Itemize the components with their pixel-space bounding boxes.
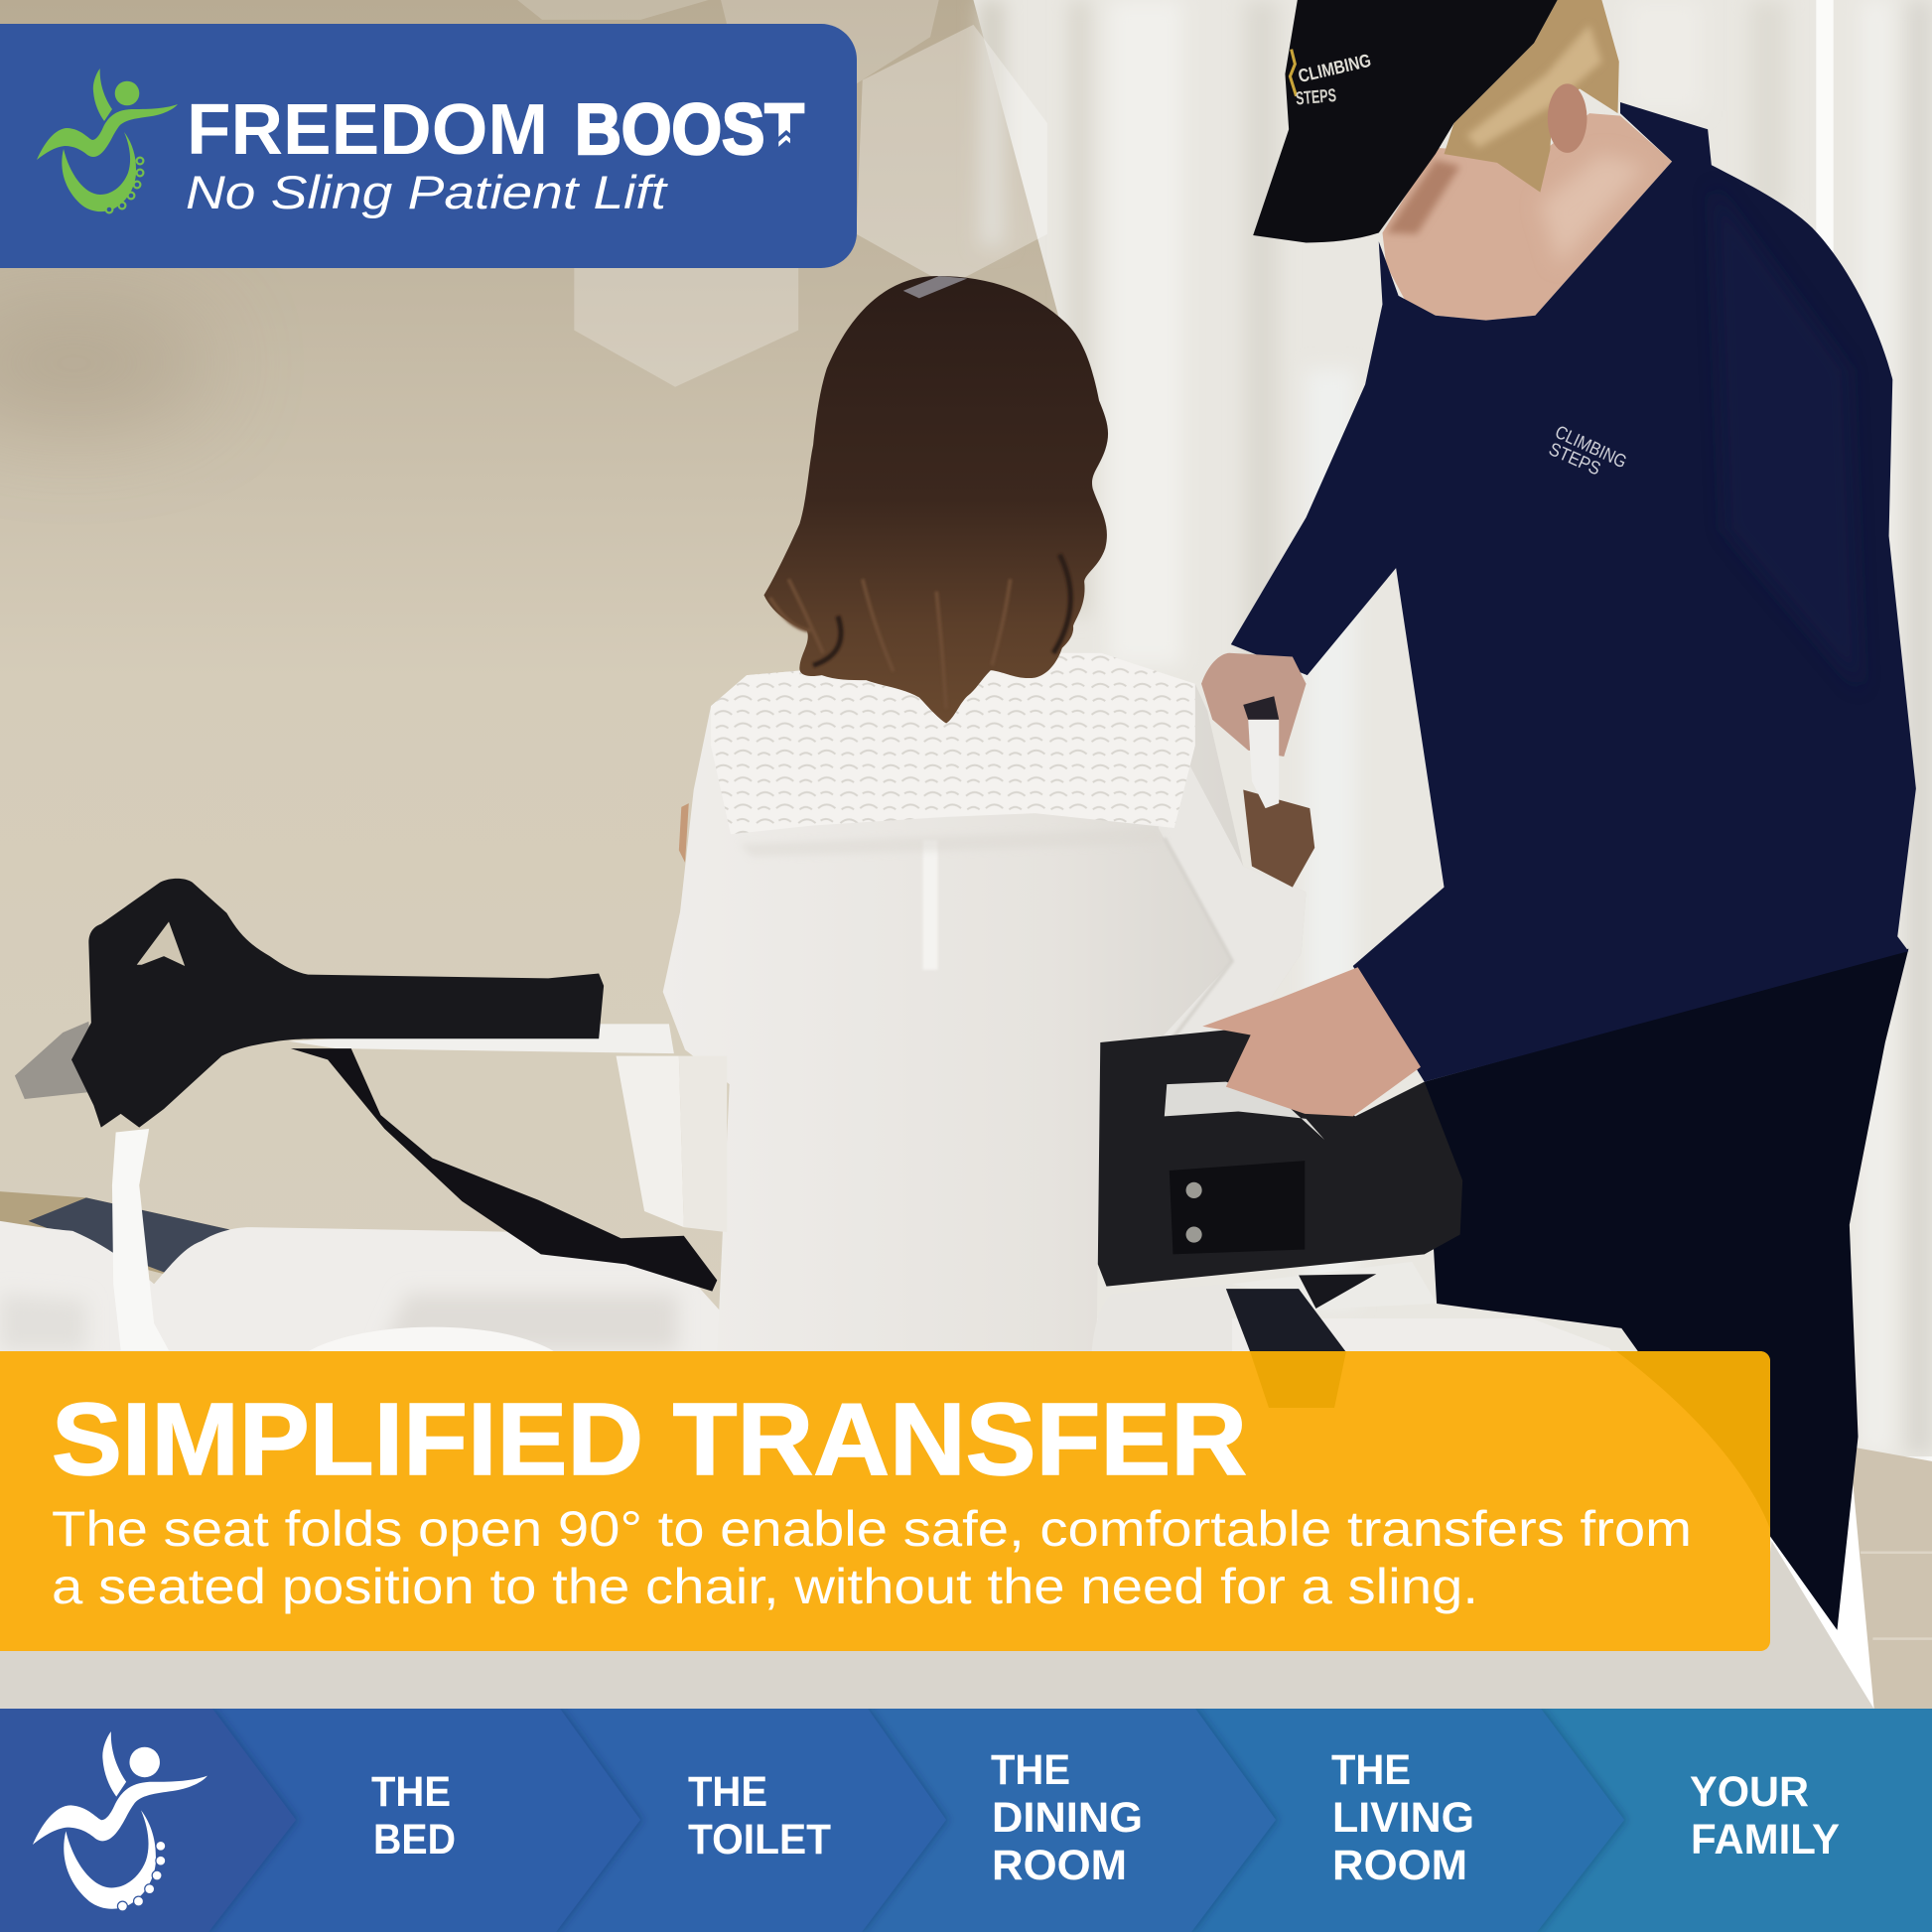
post fin (679, 1056, 727, 1232)
woman's right hand on handle (1243, 790, 1314, 888)
product name part 1: FREEDOM (187, 90, 548, 170)
shirt logo: CLIMBING (1552, 421, 1630, 472)
wall background (0, 0, 1109, 1355)
left rail bracket (617, 1056, 684, 1227)
white handle (1248, 720, 1279, 808)
left lift white rail (288, 1024, 674, 1053)
label: the living room: THE (1331, 1746, 1411, 1794)
label: your family: FAMILY (1691, 1816, 1840, 1863)
woman's white blouse (663, 653, 1307, 1353)
man's hair (1445, 0, 1619, 193)
label: the living room: ROOM (1332, 1842, 1467, 1889)
cap logo star (1290, 50, 1297, 96)
cap logo second line: STEPS (1295, 84, 1337, 108)
translucent hexagons (517, 0, 1047, 387)
man's right hand (1202, 967, 1421, 1116)
banner body line 1: The seat folds open 90° to enable safe, comfortable transfers from (52, 1501, 1692, 1557)
strap under seat (1299, 1274, 1376, 1309)
man's ear (1548, 83, 1587, 153)
hair clip reflection (903, 276, 967, 298)
seat belt strap (291, 1048, 717, 1292)
man's left hand (1201, 653, 1307, 757)
bottom navigation bar (0, 1709, 1932, 1932)
woman's hair (763, 276, 1108, 724)
buckle (15, 1022, 93, 1099)
label: the dining room: DINING (992, 1794, 1143, 1842)
hair highlight (1466, 25, 1601, 148)
man's face and neck (1382, 113, 1672, 321)
label: the bed: THE (371, 1768, 451, 1816)
man's trousers (1425, 949, 1908, 1630)
product name part 2: BOOST (575, 90, 804, 170)
shirt logo: STEPS (1546, 438, 1604, 480)
banner see-through shadows (1250, 1351, 1770, 1529)
man's navy shirt (1231, 102, 1916, 1082)
banner heading: SIMPLIFIED TRANSFER (52, 1382, 1247, 1496)
label: your family: YOUR (1690, 1768, 1809, 1816)
subtitle: No Sling Patient Lift (186, 166, 668, 218)
bedside table (0, 1191, 230, 1278)
logo: white figure in wheelchair (33, 1731, 207, 1911)
left lift post (112, 1129, 169, 1350)
woman's left hand (679, 803, 689, 863)
curtains (973, 0, 1932, 1456)
handle cap (1243, 696, 1279, 720)
lace yoke (711, 653, 1195, 834)
label: the toilet: THE (688, 1768, 767, 1816)
left lift black armrest (71, 879, 604, 1128)
right lift black armrest (1098, 1028, 1462, 1287)
label: the living room: LIVING (1332, 1794, 1474, 1842)
bed sheet (0, 1221, 1874, 1709)
man's cap (1253, 0, 1558, 242)
right seat white strip (1232, 1262, 1437, 1309)
chevron segments (0, 1709, 1932, 1932)
label: the toilet: TOILET (688, 1816, 831, 1863)
banner body line 2: a seated position to the chair, without the need for a sling. (52, 1559, 1478, 1614)
chevrons on T (778, 130, 794, 155)
label: the dining room: THE (991, 1746, 1070, 1794)
yellow feature banner (0, 1351, 1770, 1651)
logo: green figure in wheelchair (37, 69, 178, 212)
right seat support (1226, 1289, 1346, 1353)
tablet on bedside (29, 1197, 230, 1278)
top title banner (0, 24, 857, 268)
right lift white post (1092, 1284, 1232, 1353)
floor (1850, 1447, 1932, 1709)
label: the bed: BED (373, 1816, 456, 1863)
cap logo text: CLIMBING (1297, 50, 1373, 86)
wall shadow blotch (0, 308, 209, 419)
label: the dining room: ROOM (992, 1842, 1127, 1889)
